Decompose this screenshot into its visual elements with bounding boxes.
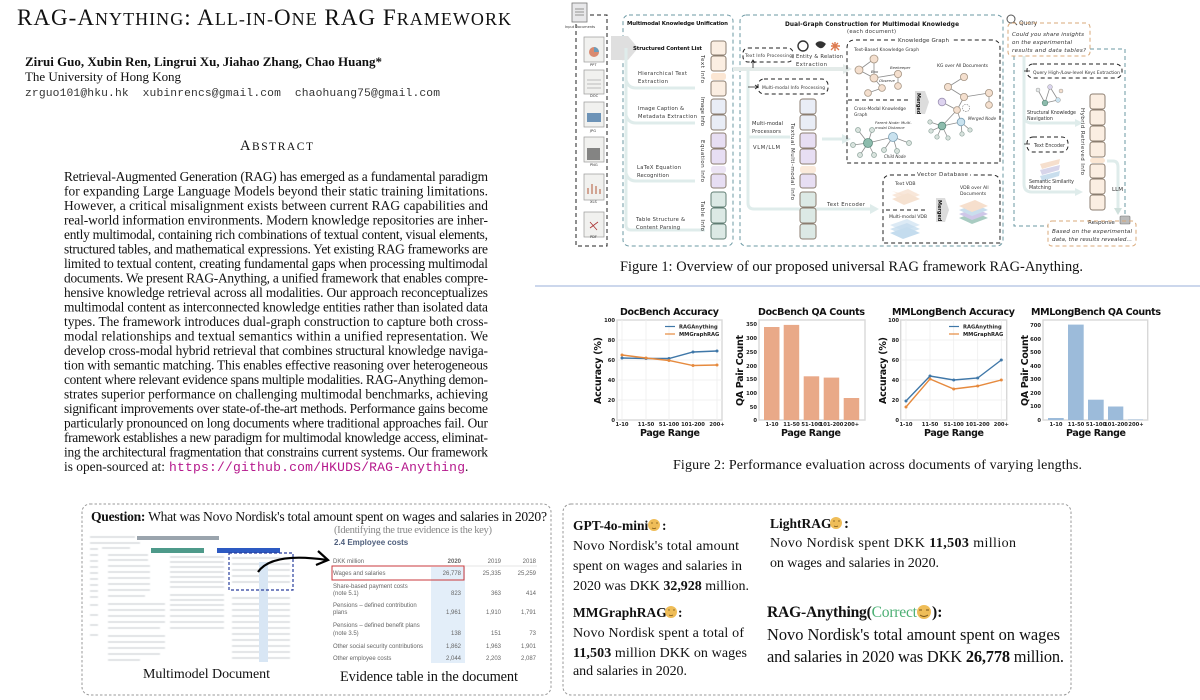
authors block: zrguo101@hku.hk xubinrencs@gmail.com chaohuang75@gmail.com xyxy=(25,88,440,100)
authors block: Zirui Guo, Xubin Ren, Lingrui Xu, Jiahao Zhang, Chao Huang* xyxy=(25,54,382,69)
panel: model answers xyxy=(563,504,1071,695)
evidence table: 2019 xyxy=(488,559,502,565)
evidence table: 1,910 xyxy=(486,610,502,616)
vector database box: Vector Database xyxy=(917,172,969,178)
chart: DocBench QA Counts: 300 xyxy=(746,336,757,342)
panel: multimodal knowledge unification: Structured Content List xyxy=(633,46,702,52)
panel: multimodal knowledge unification: Image Info xyxy=(699,97,705,127)
legend xyxy=(665,324,719,338)
chart: DocBench QA Counts: QA Pair Count xyxy=(735,335,746,406)
panel: input documents xyxy=(565,3,621,246)
panel: dual-graph construction: (each document) xyxy=(847,29,896,35)
legend xyxy=(949,324,1003,338)
chart: MMLongBench Accuracy: 100 xyxy=(888,318,899,324)
icon: magnifier xyxy=(1007,15,1017,25)
panel: query and retrieval: Text Encoder xyxy=(1033,143,1065,149)
evidence table xyxy=(332,538,537,663)
chart: DocBench Accuracy: DocBench Accuracy xyxy=(620,307,720,318)
answer: RAG-Anything correct xyxy=(767,604,1064,666)
answer: GPT-4o-mini: : xyxy=(662,518,666,533)
chart: DocBench Accuracy: 0 xyxy=(611,418,615,424)
evidence table: Share-based payment costs xyxy=(333,584,408,590)
knowledge graph box: Cross-Modal Knowledge xyxy=(854,106,906,112)
question heading: Question: What was Novo Nordisk's total amount spent on wages and salaries in 2020? xyxy=(91,509,547,524)
stack: merged vdb xyxy=(959,200,988,224)
abstract text block: content where relevant evidence spans multiple modalities. RAG-Anything demon- xyxy=(64,372,488,387)
evidence table: 151 xyxy=(491,631,502,637)
panel: dual-graph construction: Extraction xyxy=(796,62,827,68)
caption: multimodel document: Multimodel Document xyxy=(143,667,270,682)
text-based graph: Beekeeper xyxy=(890,65,911,70)
panel: query and retrieval: Matching xyxy=(1029,185,1051,191)
answer: GPT-4o-mini xyxy=(573,518,749,594)
evidence table: 2,044 xyxy=(446,656,462,662)
chart: MMLongBench QA Counts: 200+ xyxy=(1128,422,1144,428)
chart: MMLongBench Accuracy: 200+ xyxy=(994,422,1009,428)
answer: MMGraphRAG: 11,503 million DKK on wages xyxy=(573,646,747,661)
panel: multimodal knowledge unification: LaTeX Equation xyxy=(637,165,681,171)
chart: DocBench Accuracy: 51-100 xyxy=(659,422,679,428)
abstract text block: is open-sourced at: xyxy=(64,459,165,474)
evidence table: 2018 xyxy=(523,559,537,565)
panel: multimodal knowledge unification: Recognition xyxy=(637,173,669,179)
textual multi-modal info stack xyxy=(800,99,816,239)
chart: DocBench Accuracy: 101-200 xyxy=(681,422,705,428)
chart: MMLongBench Accuracy: 101-200 xyxy=(966,422,990,428)
panel: multimodal knowledge unification: Multimodal Knowledge Unification xyxy=(627,21,728,27)
evidence table: Pensions – defined contribution xyxy=(333,603,417,609)
panel: multimodal knowledge unification: Table Structure & xyxy=(635,217,685,223)
answer: MMGraphRAG: MMGraphRAG xyxy=(573,605,667,620)
response bubble xyxy=(1048,221,1136,246)
chart: DocBench QA Counts: 11-50 xyxy=(783,422,800,428)
arrow: document to table xyxy=(258,551,328,572)
chart: DocBench Accuracy: 11-50 xyxy=(638,422,655,428)
abstract heading: ABSTRACT xyxy=(240,138,313,154)
answer: MMGraphRAG: : xyxy=(678,605,682,620)
evidence table: 1,901 xyxy=(521,644,537,650)
chart: DocBench Accuracy: 80 xyxy=(608,338,615,344)
abstract text block: ing the architectural fragmentation that constrains current systems. Our framework xyxy=(64,444,488,460)
evidence table: 823 xyxy=(451,591,462,597)
merged graph xyxy=(928,73,996,140)
abstract text block: modal relationships and textual semantics within a unified representation. We xyxy=(64,328,488,344)
answer: RAG-Anything correct: RAG-Anything(Correct xyxy=(767,604,918,621)
answer: MMGraphRAG: and salaries in 2020. xyxy=(573,664,687,679)
document thumbnail xyxy=(90,536,293,662)
chart: DocBench QA Counts: 200 xyxy=(746,364,757,370)
merged arrow: Merged xyxy=(915,93,921,115)
merged arrow xyxy=(915,91,929,115)
merged graph: Merged Node xyxy=(968,116,996,121)
knowledge graph box: KG over All Documents xyxy=(937,63,989,69)
label: parallel parser: Parallel xyxy=(615,36,621,58)
knowledge graph box: Knowledge Graph xyxy=(898,38,949,44)
evidence table: Wages and salaries xyxy=(333,571,385,577)
chart: DocBench QA Counts: 100 xyxy=(746,391,757,397)
panel: dual-graph construction: Entity & Relation xyxy=(796,54,843,60)
chart: MMLongBench Accuracy: 1-10 xyxy=(900,422,913,428)
abstract text block: multimodal content as interconnected knowledge entities rather than isolated data xyxy=(64,300,488,314)
text-based graph: Observe xyxy=(879,78,896,83)
panel: multimodal knowledge unification xyxy=(611,15,733,246)
evidence table: 1,862 xyxy=(446,644,462,650)
chart: MMLongBench QA Counts: 200 xyxy=(1030,391,1041,397)
chart: MMLongBench QA Counts xyxy=(1020,307,1161,439)
query bubble: Could you share insights xyxy=(1012,32,1084,38)
chart: MMLongBench QA Counts: 1-10 xyxy=(1050,422,1063,428)
chart: MMLongBench QA Counts: 500 xyxy=(1030,350,1041,356)
evidence table: 25,335 xyxy=(483,571,502,577)
panel: dual-graph construction: Multi-modal xyxy=(752,121,783,127)
panel: query and retrieval: LLM xyxy=(1112,187,1123,193)
abstract text block: significant improvements over state-of-the-art methods. Performance gains become xyxy=(64,401,488,416)
panel: dual-graph construction: VLM/LLM xyxy=(753,145,780,151)
cross-modal graph: Parent Node: Multi- xyxy=(875,120,912,125)
cross-modal graph: modal Distance xyxy=(875,125,905,130)
panel: dual-graph construction: Textual Multi-modal Info xyxy=(789,122,795,201)
panel: query and retrieval: Query High-/Low-level Keys Extraction xyxy=(1033,70,1120,76)
evidence table: 1,963 xyxy=(486,644,502,650)
panel: input documents: Input Documents xyxy=(565,25,595,29)
panel: input documents: XLS xyxy=(590,200,597,204)
panel: query and retrieval: Structural Knowledge xyxy=(1027,110,1076,116)
answer: RAG-Anything correct: ): xyxy=(932,604,942,621)
chart: DocBench QA Counts: 250 xyxy=(746,350,757,356)
figure 2 caption: Figure 2: Performance evaluation across documents of varying lengths. xyxy=(673,458,1082,473)
panel: dual-graph construction: Processors xyxy=(752,129,781,135)
chart: MMLongBench Accuracy: 11-50 xyxy=(922,422,939,428)
panel: query and retrieval: Response xyxy=(1088,220,1115,226)
text-based graph xyxy=(855,55,911,96)
chart: MMLongBench QA Counts: 100 xyxy=(1030,404,1041,410)
chart: DocBench Accuracy: Accuracy (%) xyxy=(593,337,604,404)
icon: retrieval graph xyxy=(1036,85,1063,106)
panel: input documents: DOC xyxy=(590,94,599,98)
answer: MMGraphRAG xyxy=(573,605,747,679)
chart: DocBench QA Counts: 200+ xyxy=(844,422,859,428)
chart: MMLongBench QA Counts: 600 xyxy=(1030,337,1041,343)
evidence table: 138 xyxy=(451,631,462,637)
figure 1 caption: Figure 1: Overview of our proposed universal RAG framework RAG-Anything. xyxy=(620,259,1083,275)
abstract text block: strates superior performance on challenging multimodal benchmarks, achieving xyxy=(64,386,488,402)
evidence table: Pensions – defined benefit plans xyxy=(333,623,420,629)
chart: DocBench QA Counts: 150 xyxy=(746,377,757,383)
abstract text block: https://github.com/HKUDS/RAG-Anything xyxy=(169,460,465,475)
chart: MMLongBench Accuracy: 0 xyxy=(895,418,899,424)
panel: multimodal knowledge unification: Content Parsing xyxy=(636,225,680,231)
panel: dual-graph construction xyxy=(733,15,1003,246)
vector database box: Multi-modal VDB xyxy=(889,214,927,220)
caption: evidence table: Evidence table in the document xyxy=(340,669,518,685)
vector database box: Merged xyxy=(936,200,942,222)
answer: LightRAG: Novo Nordisk spent DKK 11,503 million xyxy=(770,536,1016,551)
panel: query and retrieval xyxy=(1007,15,1136,246)
abstract text block: Retrieval-Augmented Generation (RAG) has emerged as a fundamental paradigm xyxy=(64,169,489,184)
stack: multi-modal vdb xyxy=(890,219,920,239)
chart: DocBench Accuracy: 40 xyxy=(608,378,615,384)
evidence table: 2,203 xyxy=(486,656,502,662)
panel: multimodal knowledge unification: Equation Info xyxy=(699,140,705,183)
evidence table: (note 3.5) xyxy=(333,631,359,637)
evidence table: 1,961 xyxy=(446,610,462,616)
legend: RAGAnything xyxy=(679,324,718,330)
chart: DocBench QA Counts: 51-100 xyxy=(801,422,822,428)
evidence table: 363 xyxy=(491,591,502,597)
panel: multimodal knowledge unification: Metadata Extraction xyxy=(638,114,697,120)
abstract text block: ently multimodal, containing rich combinations of textual content, visual elements, xyxy=(64,227,488,242)
chart: MMLongBench Accuracy: 60 xyxy=(892,358,899,364)
evidence table: 2.4 Employee costs xyxy=(334,538,409,547)
chart: MMLongBench Accuracy: 40 xyxy=(892,378,899,384)
chart: DocBench QA Counts: 50 xyxy=(750,405,757,411)
answer: GPT-4o-mini: spent on wages and salaries in xyxy=(573,559,742,574)
chart: MMLongBench Accuracy: Page Range xyxy=(924,428,984,439)
panel: multimodal knowledge unification: Extraction xyxy=(638,79,668,85)
query bubble: on the experimental xyxy=(1012,40,1072,46)
chart: DocBench QA Counts: DocBench QA Counts xyxy=(758,307,865,318)
answer: LightRAG: LightRAG xyxy=(770,516,832,531)
response bubble: data, the results revealed... xyxy=(1052,237,1132,243)
abstract text block: particularly pronounced on long documents where traditional approaches fail. Our xyxy=(64,416,489,430)
chart: DocBench QA Counts xyxy=(735,307,865,439)
legend: RAGAnything xyxy=(963,324,1002,330)
answer: RAG-Anything correct: Novo Nordisk's total amount spent on wages xyxy=(767,625,1060,644)
query bubble xyxy=(1008,23,1090,56)
evidence table: 1,791 xyxy=(521,610,537,616)
answer: GPT-4o-mini: GPT-4o-mini xyxy=(573,518,649,533)
panel: dual-graph construction: Multi-modal Info Processing xyxy=(762,85,825,91)
vector database box: Text VDB xyxy=(894,181,916,187)
authors block: The University of Hong Kong xyxy=(25,69,182,84)
abstract text block: tion with semantic matching. This enables effective reasoning over heterogeneous xyxy=(64,358,488,372)
abstract text block: limited to textual content, creating fundamental gaps when processing multimodal xyxy=(64,256,488,271)
panel: dual-graph construction: Text Encoder xyxy=(826,202,866,208)
evidence table: Other social security contributions xyxy=(333,644,423,650)
abstract text block: framework establishes a new paradigm for multimodal knowledge access, eliminat- xyxy=(64,430,488,445)
panel: input documents: JPG xyxy=(589,129,596,133)
vector database box: Documents xyxy=(960,191,987,197)
abstract text block: for expanding Large Language Models beyond their static training limitations. xyxy=(64,184,488,198)
abstract text block: . xyxy=(465,459,468,474)
vector database box xyxy=(883,172,1000,243)
chart: DocBench QA Counts: 0 xyxy=(753,418,757,424)
vector database box: VDB over All xyxy=(960,185,989,191)
panel: multimodal knowledge unification: Table Info xyxy=(699,200,705,232)
chart: DocBench Accuracy: 1-10 xyxy=(616,422,629,428)
divider line xyxy=(535,285,1200,287)
abstract text block: structured tables, and mathematical expressions. Yet existing RAG frameworks are xyxy=(64,242,488,256)
abstract text block: real-world information environments. Modern knowledge repositories are inher- xyxy=(64,212,488,228)
chart: DocBench Accuracy xyxy=(593,307,725,439)
abstract text block: hensive knowledge retrieval across all modalities. Our approach reconceptualizes xyxy=(64,285,488,300)
evidence table: 414 xyxy=(526,591,537,597)
icons: llm logos xyxy=(798,41,840,51)
legend: MMGraphRAG xyxy=(963,332,1003,338)
response bubble: Based on the experimental xyxy=(1052,229,1132,235)
evidence table: Other employee costs xyxy=(333,656,391,662)
abstract text block: documents. We present RAG-Anything, a unified framework that enables compre- xyxy=(64,270,488,286)
chart: MMLongBench QA Counts: MMLongBench QA Counts xyxy=(1031,307,1161,318)
cross-modal graph xyxy=(850,120,912,159)
chart: MMLongBench QA Counts: Page Range xyxy=(1066,428,1126,439)
panel: multimodal knowledge unification: Image Caption & xyxy=(638,106,684,112)
evidence table: plans xyxy=(333,610,347,616)
panel: query and retrieval: Navigation xyxy=(1027,116,1053,122)
chart: DocBench Accuracy: 100 xyxy=(604,318,615,324)
hybrid retrieved info stack xyxy=(1090,94,1105,210)
panel: query and retrieval: Hybrid Retrieved Info xyxy=(1079,108,1085,176)
legend: MMGraphRAG xyxy=(679,332,719,338)
abstract text block: types. The framework introduces dual-graph construction to capture both cross- xyxy=(64,314,488,329)
chart: DocBench Accuracy: 200+ xyxy=(709,422,725,428)
evidence table: 2020 xyxy=(448,559,462,565)
chart: MMLongBench QA Counts: 11-50 xyxy=(1068,422,1085,428)
panel: multimodal knowledge unification: Text Info xyxy=(699,54,705,84)
chart: MMLongBench Accuracy: 51-100 xyxy=(944,422,964,428)
chart: MMLongBench Accuracy: Accuracy (%) xyxy=(878,337,889,404)
evidence table: DKK million xyxy=(333,559,364,565)
chart: MMLongBench Accuracy xyxy=(878,307,1016,439)
stack: text vdb xyxy=(892,189,920,205)
chart: DocBench QA Counts: Page Range xyxy=(781,428,841,439)
abstract text block xyxy=(64,169,489,475)
icon: response xyxy=(1120,216,1130,224)
evidence table: 73 xyxy=(529,631,537,637)
answer: LightRAG: : xyxy=(844,516,849,532)
chart: DocBench Accuracy: Page Range xyxy=(640,428,700,439)
chart: DocBench QA Counts: 350 xyxy=(746,322,757,328)
chart: DocBench QA Counts: 1-10 xyxy=(766,422,779,428)
panel: input documents: PNG xyxy=(590,163,598,167)
answer: GPT-4o-mini: 2020 was DKK 32,928 million. xyxy=(573,579,749,594)
answer: LightRAG xyxy=(770,516,1016,571)
answer: LightRAG: on wages and salaries in 2020. xyxy=(770,556,939,571)
paper header: title: RAG-ANYTHING: ALL-IN-ONE RAG FRAMEWORK xyxy=(17,5,511,30)
knowledge graph box: Text-Based Knowledge Graph xyxy=(853,47,919,53)
figure 1: framework architecture diagram xyxy=(565,3,1136,246)
panel: query and retrieval: Semantic Similarity xyxy=(1029,179,1074,185)
text-based graph: Box xyxy=(871,69,879,74)
panel: multimodal knowledge unification: Hierarchical Text xyxy=(638,71,687,77)
evidence hint: (Identifying the true evidence is the key) xyxy=(334,525,492,536)
chart: MMLongBench Accuracy: 20 xyxy=(892,398,899,404)
panel: input documents: PPT xyxy=(590,63,597,67)
chart: DocBench Accuracy: 60 xyxy=(608,358,615,364)
cross-modal graph: Child Node xyxy=(884,154,906,159)
answer: GPT-4o-mini: Novo Nordisk's total amount xyxy=(573,539,739,554)
chart: MMLongBench QA Counts: 300 xyxy=(1030,377,1041,383)
structured content list stack xyxy=(711,41,726,239)
chart: MMLongBench QA Counts: 101-200 xyxy=(1104,422,1128,428)
evidence table: 26,778 xyxy=(443,571,462,577)
evidence table: 2,087 xyxy=(521,656,537,662)
abstract text block: However, a critical misalignment exists between current RAG capabilities and xyxy=(64,198,488,213)
panel: dual-graph construction: Text Info Processing xyxy=(744,53,792,59)
chart: DocBench QA Counts: 101-200 xyxy=(820,422,844,428)
chart: MMLongBench QA Counts: QA Pair Count xyxy=(1020,335,1031,406)
panel: question and evidence xyxy=(82,504,551,695)
authors block xyxy=(25,54,440,100)
panel: query and retrieval: Query xyxy=(1019,20,1038,27)
chart: MMLongBench QA Counts: 700 xyxy=(1030,323,1041,329)
chart: MMLongBench Accuracy: MMLongBench Accuracy xyxy=(892,307,1016,318)
panel: input documents: PDF xyxy=(590,235,597,239)
stack: semantic matching xyxy=(1040,159,1060,181)
knowledge graph box: Graph xyxy=(854,112,868,118)
answer: RAG-Anything correct: and salaries in 2020 was DKK 26,778 million. xyxy=(767,647,1064,666)
knowledge graph box xyxy=(847,38,1000,163)
evidence table: (note 5.1) xyxy=(333,591,359,597)
chart: MMLongBench QA Counts: 51-100 xyxy=(1086,422,1106,428)
answer: MMGraphRAG: Novo Nordisk spent a total of xyxy=(573,626,744,641)
chart: MMLongBench QA Counts: 400 xyxy=(1030,364,1041,370)
chart: MMLongBench Accuracy: 80 xyxy=(892,338,899,344)
chart: DocBench Accuracy: 20 xyxy=(608,398,615,404)
panel: dual-graph construction: Dual-Graph Construction for Multimodal Knowledge xyxy=(785,22,959,28)
query bubble: results and data tables? xyxy=(1012,48,1086,54)
chart: MMLongBench QA Counts: 0 xyxy=(1037,418,1041,424)
abstract text block: develop cross-modal hybrid retrieval that combines structural knowledge naviga- xyxy=(64,343,488,358)
evidence table: 25,259 xyxy=(518,571,537,577)
